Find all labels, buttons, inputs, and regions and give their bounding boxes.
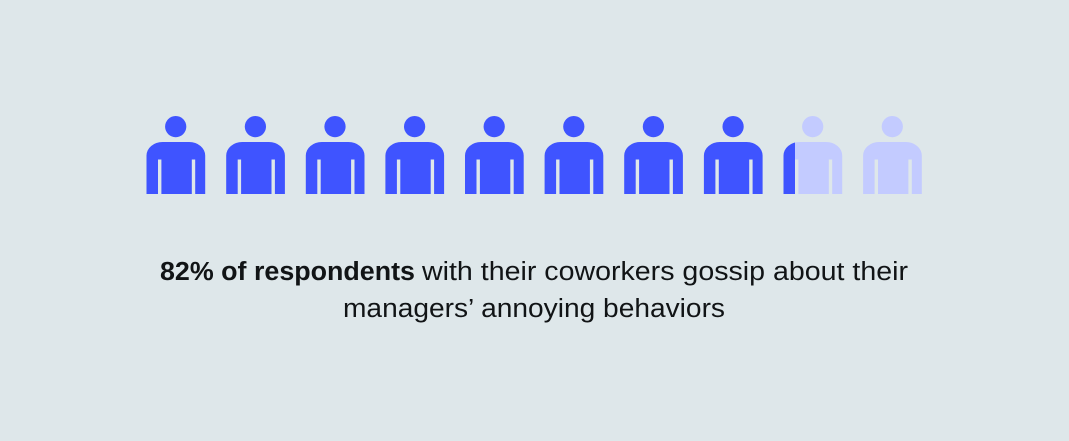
caption [160, 258, 909, 323]
infographic canvas [146, 116, 922, 322]
icon: person 6 filled [545, 116, 603, 194]
caption line 1 regular: with their coworkers gossip about their [421, 258, 909, 286]
caption line 2: managers’ annoying behaviors [343, 295, 725, 323]
icon: person 1 filled [146, 116, 205, 194]
caption line 1 bold lead: 82% of respondents [160, 258, 415, 286]
icon: person 5 filled [465, 116, 524, 194]
icon: person 10 unfilled [863, 116, 922, 194]
icon: person 9 partially filled [784, 116, 842, 194]
icon: person 4 filled [385, 116, 444, 194]
icon: person 3 filled [306, 116, 364, 194]
icon: person 2 filled [226, 116, 285, 194]
icon: person 7 filled [624, 116, 683, 194]
icon: person 8 filled [704, 116, 763, 194]
pictogram row: 82 of 100 people [146, 116, 922, 194]
